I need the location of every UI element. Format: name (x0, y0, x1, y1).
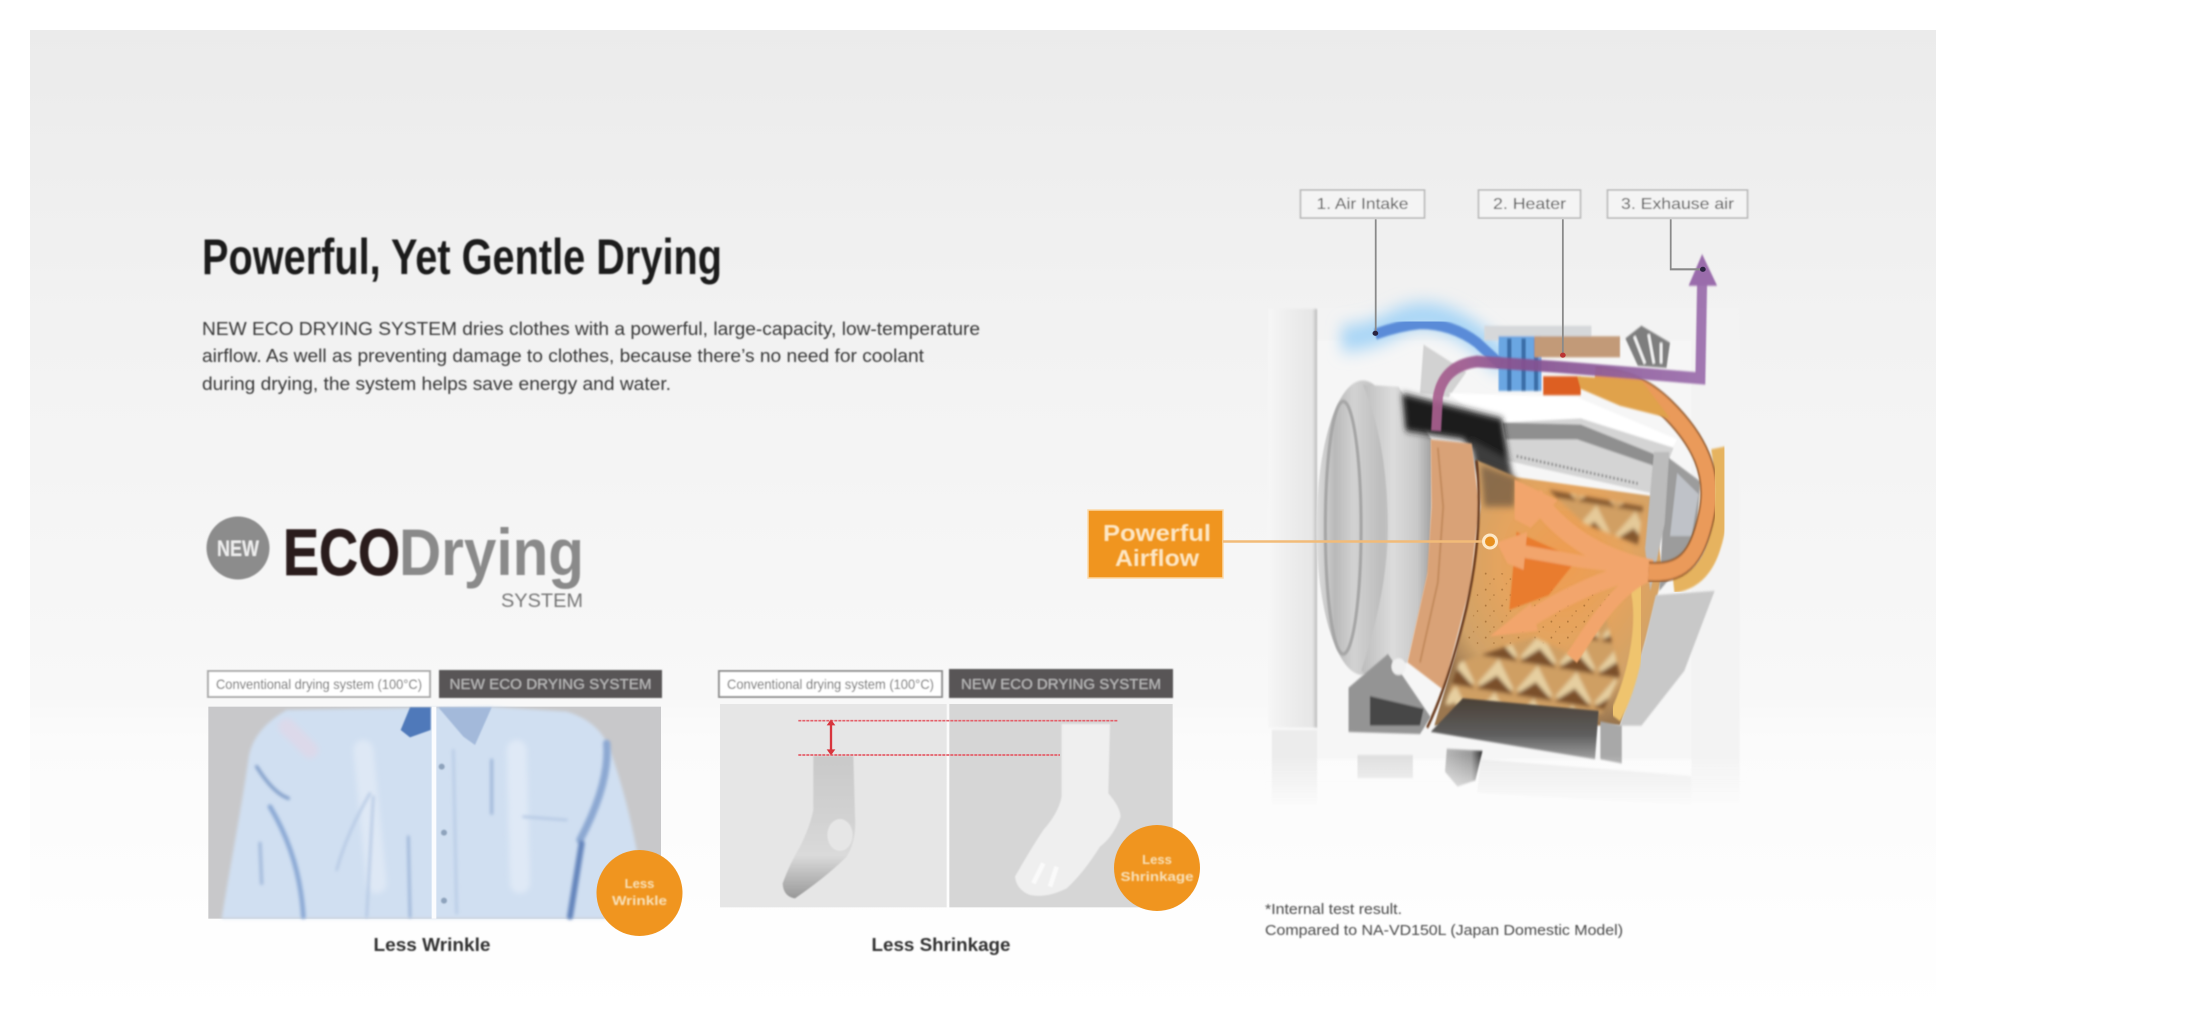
leader lines (1376, 219, 1702, 355)
airflow arrows (1490, 479, 1652, 658)
header: conventional (719, 671, 942, 697)
badge: less wrinkle: Wrinkle (612, 893, 667, 908)
intro text block (202, 319, 980, 394)
logo: new eco drying system (206, 515, 584, 612)
front clamp (1349, 654, 1431, 734)
header: conventional (208, 671, 430, 697)
sock: normal (1015, 724, 1121, 896)
label: exhaust air: 3. Exhause air (1621, 196, 1735, 213)
bottom fade (1265, 755, 1747, 827)
drum tread pattern (1445, 490, 1643, 713)
header: new eco (949, 669, 1173, 698)
intro text block: NEW ECO DRYING SYSTEM dries clothes with a powerful, large-capacity, low-temperature (202, 319, 980, 339)
label: exhaust air (1608, 190, 1748, 218)
measure lines (798, 719, 1118, 755)
header: new eco: NEW ECO DRYING SYSTEM (961, 677, 1161, 693)
shirt photo comparison (208, 707, 661, 919)
footnote: *Internal test result. (1265, 902, 1402, 918)
callout: powerful airflow: Powerful (1103, 520, 1211, 546)
intro text block: during drying, the system helps save energy and water. (202, 374, 671, 394)
logo system: SYSTEM (501, 591, 583, 612)
lower drum mesh (1431, 698, 1599, 759)
header: new eco (439, 670, 662, 698)
label: air intake: 1. Air Intake (1316, 196, 1409, 213)
intro text block: airflow. As well as preventing damage to clothes, because there’s no need for coolant (202, 346, 924, 366)
footnote: Compared to NA-VD150L (Japan Domestic Model) (1265, 923, 1623, 939)
sock photo comparison (720, 704, 1173, 907)
foot (1445, 749, 1482, 787)
blue intake glow (1341, 316, 1506, 364)
panel: less shrinkage (719, 669, 1200, 955)
badge: less wrinkle (596, 850, 682, 936)
drum body (1434, 460, 1663, 726)
top components (1484, 326, 1670, 418)
rear gold ring (1615, 585, 1640, 717)
badge: less shrinkage: Shrinkage (1120, 869, 1194, 884)
badge: less shrinkage (1114, 825, 1200, 911)
drum front band (1407, 439, 1479, 728)
label: air intake (1300, 190, 1424, 218)
label: heater: 2. Heater (1493, 196, 1567, 213)
rear structure (1600, 452, 1715, 763)
header: conventional: Conventional drying system (100°C) (727, 676, 934, 692)
leader dots (1372, 267, 1706, 358)
diagram: washer dryer cutaway (1265, 219, 1747, 827)
callout: powerful airflow (1088, 510, 1496, 578)
dark interior shadow (1402, 393, 1513, 481)
drum door (1316, 380, 1431, 677)
badge: less shrinkage: Less (1142, 852, 1172, 867)
header: new eco: NEW ECO DRYING SYSTEM (450, 677, 652, 693)
footnote (1265, 902, 1623, 939)
top duct housing (1420, 345, 1677, 494)
label: heater (1478, 190, 1580, 218)
cabinet (1268, 307, 1740, 806)
yellow outer duct (1674, 448, 1722, 585)
sock: shrunk (783, 756, 855, 898)
icon: new badge (206, 516, 270, 580)
panel: less wrinkle (208, 670, 682, 955)
orange exhaust duct (1595, 376, 1709, 572)
purple air path (1436, 254, 1717, 431)
caption: less wrinkle: Less Wrinkle (374, 935, 490, 955)
title: Powerful, Yet Gentle Drying (202, 229, 722, 285)
drum top shadow (1481, 465, 1516, 507)
caption: less shrinkage: Less Shrinkage (872, 935, 1010, 955)
logo wordmark drying: Drying (399, 515, 584, 589)
drum speckles (1466, 570, 1613, 646)
callout: powerful airflow: Airflow (1115, 545, 1199, 571)
blue intake arrow (1375, 324, 1502, 366)
badge: less wrinkle: Less (625, 876, 654, 891)
icon: new badge: NEW (217, 536, 259, 561)
header: conventional: Conventional drying system (100°C) (216, 676, 422, 692)
logo wordmark: ECO (283, 515, 400, 589)
